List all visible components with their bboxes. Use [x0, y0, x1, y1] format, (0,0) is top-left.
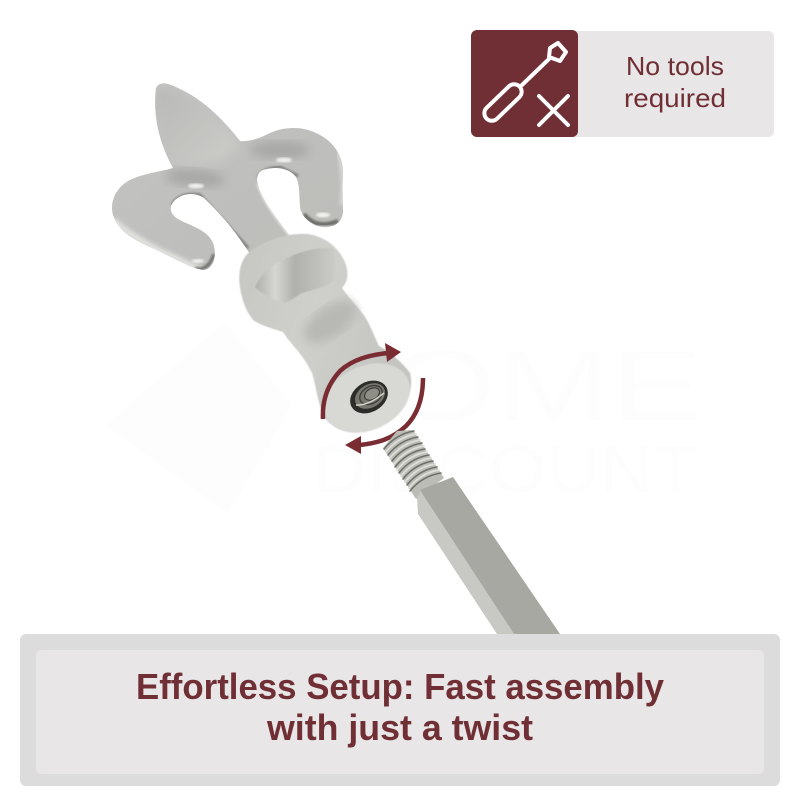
caption line one: Effortless Setup: Fast assembly — [136, 666, 664, 707]
threaded rod — [383, 430, 560, 634]
rod dark front face — [420, 477, 560, 634]
x mark — [539, 96, 568, 125]
screwdriver shaft — [522, 59, 549, 85]
finial collar and waist — [239, 234, 411, 432]
line one: No tools — [626, 51, 724, 81]
label text — [624, 51, 726, 113]
finial waist shading — [297, 293, 363, 351]
panel: caption — [20, 634, 780, 786]
finial cone — [255, 248, 335, 303]
label background — [560, 31, 774, 137]
screwdriver handle — [481, 81, 525, 124]
fleur-de-lis finial — [112, 83, 412, 433]
icon tile — [471, 30, 578, 137]
watermark: Home Discount logo — [105, 322, 703, 514]
caption outer band — [20, 634, 780, 786]
finial end face — [313, 350, 421, 446]
icon: screwdriver crossed — [481, 43, 568, 125]
rod light side face — [417, 490, 514, 634]
caption heading — [136, 666, 664, 748]
rod thread — [383, 430, 444, 499]
watermark word HOME: OME — [388, 330, 703, 442]
panel: no tools required — [471, 30, 774, 137]
watermark house badge — [105, 322, 292, 514]
screwdriver tip — [549, 43, 566, 61]
finial head — [112, 83, 344, 270]
caption line two: with just a twist — [266, 707, 533, 748]
line two: required — [624, 83, 726, 113]
threaded hole — [344, 374, 394, 420]
caption inner band — [36, 650, 764, 774]
watermark word DISCOUNT: DISCOUNT — [313, 432, 698, 506]
rotation arrow: lower clockwise — [345, 378, 423, 454]
rotation arrow: upper clockwise — [323, 343, 401, 419]
